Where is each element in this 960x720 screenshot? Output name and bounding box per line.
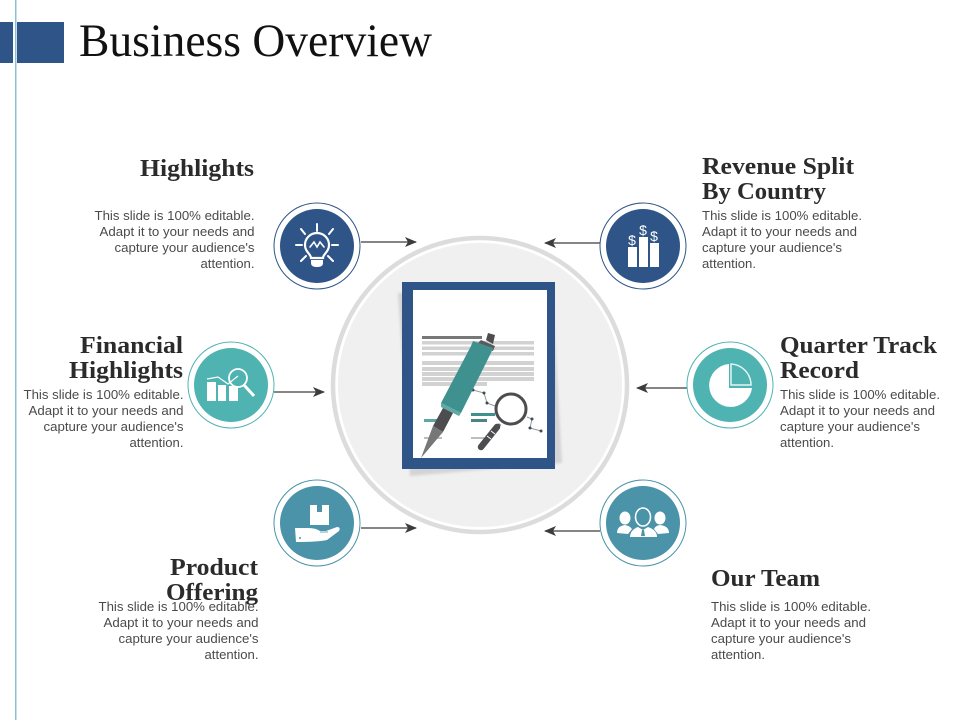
dotted trend line: [472, 388, 542, 432]
text block: revenue split by country: capture your audience's: [702, 240, 843, 255]
text block: revenue split by country: Revenue Split: [702, 154, 854, 180]
title: Business Overview: [79, 15, 432, 67]
icon badge: revenue bars: [600, 203, 686, 289]
text block: revenue split by country: [702, 154, 862, 271]
text block: financial highlights: Adapt it to your needs and: [28, 403, 184, 418]
text block: financial highlights: [24, 333, 184, 450]
document back sheet: [398, 287, 562, 476]
text block: revenue split by country: Adapt it to your needs and: [702, 224, 857, 239]
text block: financial highlights: attention.: [130, 435, 184, 450]
text block: quarter track record: Adapt it to your needs and: [780, 403, 935, 418]
text block: financial highlights: Financial: [80, 333, 183, 359]
text block: highlights: [94, 156, 255, 271]
text block: financial highlights: This slide is 100% editable.: [24, 387, 184, 402]
text block: product offering: attention.: [204, 647, 258, 662]
text block: our team: Our Team: [711, 566, 820, 592]
text block: our team: capture your audience's: [711, 631, 852, 646]
text block: financial highlights: capture your audience's: [44, 419, 184, 434]
text block: quarter track record: This slide is 100% editable.: [780, 387, 940, 402]
text block: revenue split by country: This slide is 100% editable.: [702, 208, 862, 223]
text block: our team: [711, 566, 871, 662]
icon badge: team people: [600, 480, 686, 566]
text block: revenue split by country: attention.: [702, 256, 756, 271]
icon badge: product hand and box: [274, 480, 360, 566]
text block: product offering: This slide is 100% editable.: [98, 599, 258, 614]
text block: our team: attention.: [711, 647, 765, 662]
document text lines: [422, 336, 534, 439]
icon badge: revenue bars: $: [628, 232, 636, 248]
document page: [413, 290, 547, 458]
text block: quarter track record: Quarter Track: [780, 333, 938, 359]
text block: product offering: capture your audience's: [118, 631, 259, 646]
document frame: [402, 282, 555, 469]
text block: highlights: attention.: [200, 256, 254, 271]
central circle: [333, 238, 627, 532]
header accent blocks: [0, 0, 64, 720]
text block: highlights: This slide is 100% editable.: [94, 208, 254, 223]
icon badge: revenue bars: $: [639, 222, 647, 238]
text block: highlights: Highlights: [140, 156, 254, 182]
central document illustration: [398, 282, 562, 476]
icon badge: financial chart magnifier: [188, 342, 274, 428]
text block: our team: This slide is 100% editable.: [711, 599, 871, 614]
connector arrows: [274, 242, 687, 531]
text block: highlights: Adapt it to your needs and: [100, 224, 254, 239]
text block: quarter track record: [780, 333, 940, 450]
icon badge: quarter pie chart: [687, 342, 773, 428]
icon badge: highlights lightbulb: [274, 203, 360, 289]
text block: product offering: [98, 555, 259, 662]
text block: revenue split by country: By Country: [702, 179, 826, 205]
magnifier: [481, 394, 526, 447]
text block: financial highlights: Highlights: [69, 358, 183, 384]
text block: product offering: Product: [170, 555, 258, 581]
text block: product offering: Adapt it to your needs and: [104, 615, 258, 630]
icon badge: revenue bars: $: [650, 228, 658, 244]
text block: highlights: capture your audience's: [114, 240, 255, 255]
pen: [421, 333, 495, 458]
text block: quarter track record: capture your audience's: [780, 419, 921, 434]
text block: quarter track record: Record: [780, 358, 860, 384]
text block: our team: Adapt it to your needs and: [711, 615, 866, 630]
text block: quarter track record: attention.: [780, 435, 834, 450]
text block: product offering: Offering: [166, 580, 258, 606]
